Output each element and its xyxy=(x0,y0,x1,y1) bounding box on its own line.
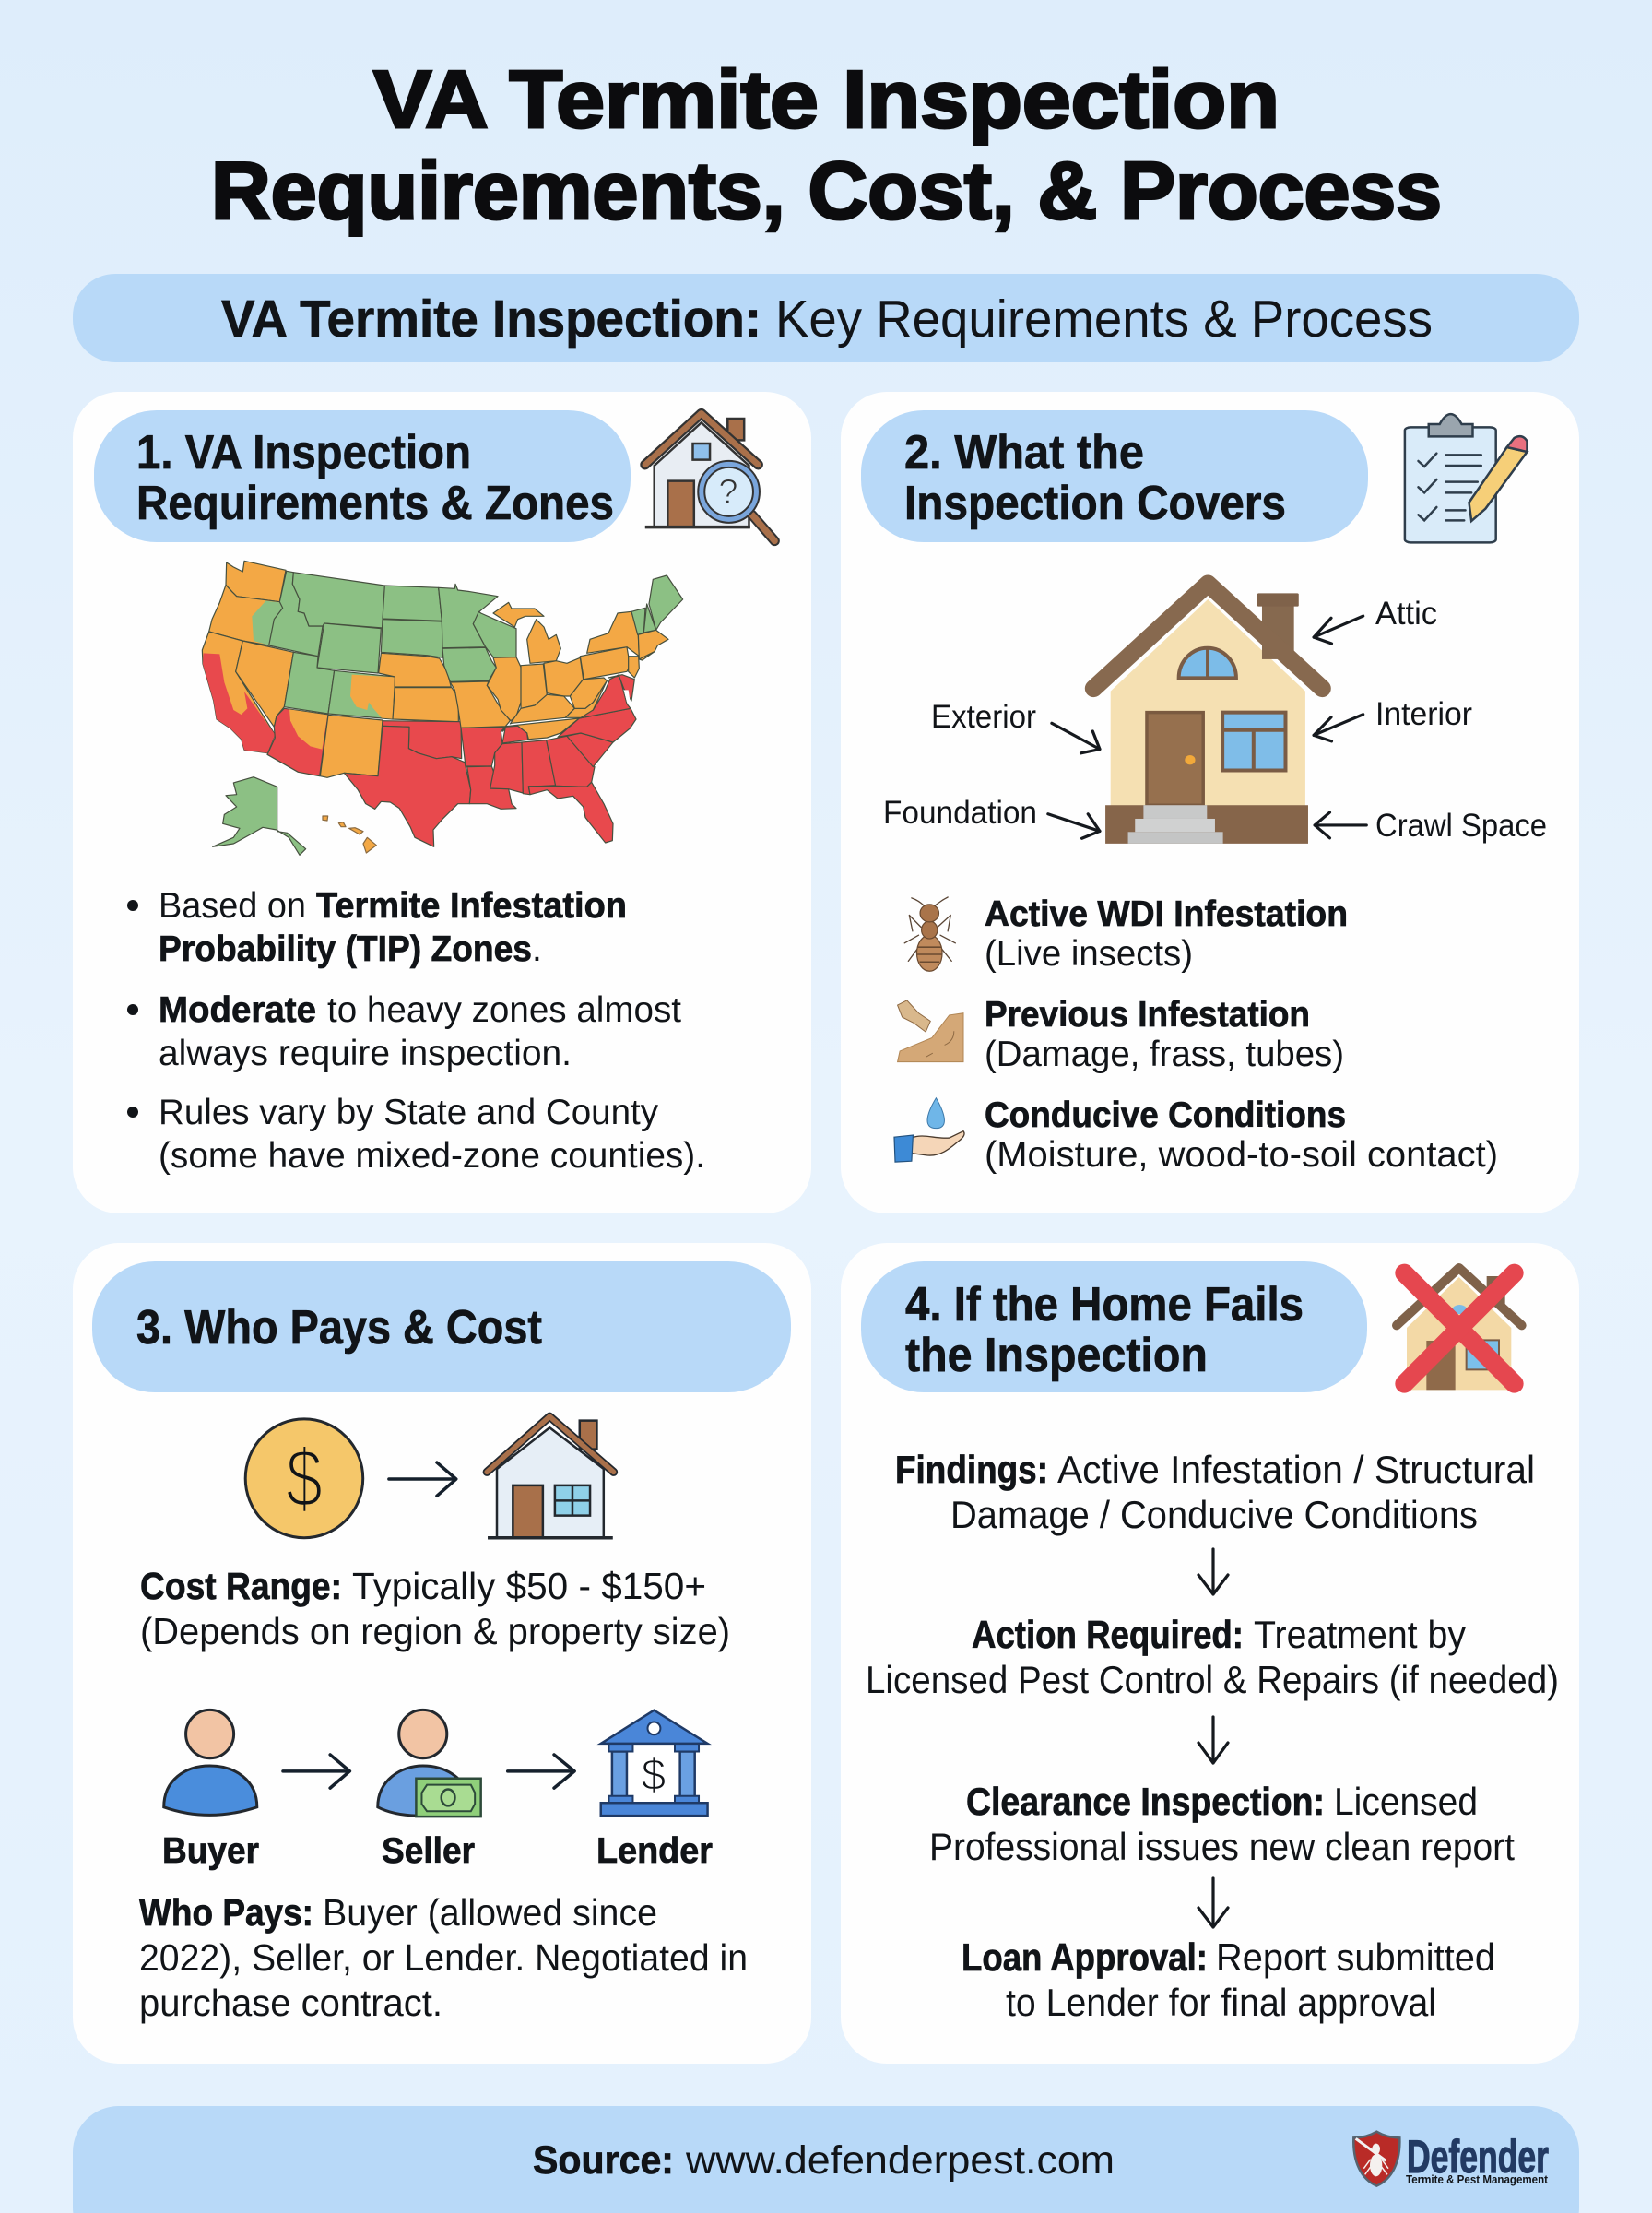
flow step: findings: Active Infestation / Structural xyxy=(1057,1448,1535,1491)
text: who pays: 2022), Seller, or Lender. Negotiated in xyxy=(139,1936,748,1979)
subtitle banner: VA Termite Inspection: xyxy=(221,290,761,349)
bullet list: TIP zones: Based on xyxy=(159,886,306,926)
logo: Defender: Defender xyxy=(1407,2131,1549,2183)
bullet list: TIP zones: . xyxy=(532,929,542,969)
text: who pays: purchase contract. xyxy=(139,1982,442,2024)
bullet list: TIP zones: Moderate xyxy=(159,990,316,1030)
diagram: house with inspection areas xyxy=(883,584,1547,844)
heading pill 3: 3. Who Pays & Cost xyxy=(136,1301,542,1355)
flow step: clearance inspection: Professional issues new clean report xyxy=(929,1825,1515,1868)
icons: buyer, seller, lender flow: Seller xyxy=(382,1831,475,1871)
heading pill 4: the Inspection xyxy=(905,1329,1208,1382)
flow step: loan approval xyxy=(962,1935,1495,2024)
logo: Defender: Termite & Pest Management xyxy=(1406,2172,1549,2186)
eastern states xyxy=(439,575,683,843)
text: cost range: (Depends on region & property size) xyxy=(140,1610,730,1652)
flow step: findings: Damage / Conducive Conditions xyxy=(950,1493,1478,1536)
western states xyxy=(202,561,471,855)
diagram: house with inspection areas: Attic xyxy=(1375,596,1437,632)
icon: crossed-out house xyxy=(1397,1268,1522,1390)
list: what inspector looks for: (Damage, frass, tubes) xyxy=(985,1035,1344,1074)
source line: Source: xyxy=(533,2138,674,2183)
icon: house with magnifier xyxy=(645,413,774,541)
list: what inspector looks for: Conducive Conditions xyxy=(985,1095,1346,1135)
icons: buyer, seller, lender flow: $ xyxy=(642,1751,666,1800)
arrows pointing to house xyxy=(1048,616,1366,838)
text: who pays: Who Pays: xyxy=(139,1891,313,1934)
list: what inspector looks for xyxy=(985,894,1498,1175)
text: who pays xyxy=(139,1891,748,2024)
arrow down xyxy=(1198,1878,1228,1927)
text: cost range: Typically $50 - $150+ xyxy=(352,1565,706,1607)
bullet list: TIP zones: to heavy zones almost xyxy=(327,990,681,1030)
subtitle banner: Key Requirements & Process xyxy=(775,290,1433,349)
flow step: clearance inspection xyxy=(929,1780,1515,1868)
icon: termite xyxy=(904,897,955,971)
icon: dollar coin to house xyxy=(245,1416,614,1538)
icon: house with magnifier: ? xyxy=(718,473,738,512)
subtitle banner xyxy=(73,274,1579,362)
arrow down xyxy=(1198,1549,1228,1594)
list: what inspector looks for: (Live insects) xyxy=(985,934,1193,974)
list: what inspector looks for: Previous Infestation xyxy=(985,995,1310,1035)
icons: buyer, seller, lender flow: Lender xyxy=(596,1831,713,1871)
heading pill 1: Requirements & Zones xyxy=(136,477,614,530)
heading pill 2: Inspection Covers xyxy=(904,477,1286,530)
icons: buyer, seller, lender flow: Buyer xyxy=(162,1831,259,1871)
diagram: house with inspection areas: Crawl Space xyxy=(1375,808,1547,844)
icon: dollar coin to house: $ xyxy=(286,1433,323,1525)
list: what inspector looks for: (Moisture, wood-to-soil contact) xyxy=(985,1135,1498,1175)
flow step: action required: Action Required: xyxy=(972,1613,1244,1656)
heading pill 4: 4. If the Home Fails xyxy=(905,1278,1304,1331)
flow step: loan approval: to Lender for final approval xyxy=(1006,1981,1436,2024)
heading pill 1: 1. VA Inspection xyxy=(136,426,471,479)
diagram: house with inspection areas: Interior xyxy=(1375,696,1472,732)
title: Requirements, Cost, & Process xyxy=(211,145,1442,236)
panel: 2. what the inspection covers xyxy=(841,392,1579,1213)
house illustration xyxy=(1048,584,1366,844)
diagram: house with inspection areas: Foundation xyxy=(883,795,1037,831)
icon: water drop and hand xyxy=(894,1098,964,1162)
flow step: findings xyxy=(895,1448,1535,1536)
map: US termite infestation probability zones xyxy=(202,561,683,855)
bullet list: TIP zones: always require inspection. xyxy=(159,1034,572,1073)
panel: 1. VA inspection requirements and zones xyxy=(73,392,811,1213)
icon: wood damage xyxy=(898,1000,963,1062)
flow step: loan approval: Loan Approval: xyxy=(962,1935,1208,1979)
logo: Defender xyxy=(1353,2131,1549,2186)
panel: 4. if the home fails the inspection xyxy=(841,1243,1579,2064)
flow step: clearance inspection: Clearance Inspection: xyxy=(966,1780,1325,1823)
title: VA Termite Inspection xyxy=(373,53,1280,145)
flow step: clearance inspection: Licensed xyxy=(1334,1780,1478,1823)
icon: clipboard and pencil xyxy=(1405,414,1527,542)
title xyxy=(211,53,1442,236)
panel: 3. who pays and cost xyxy=(73,1243,811,2064)
flow step: findings: Findings: xyxy=(895,1448,1048,1491)
diagram: house with inspection areas: Exterior xyxy=(931,699,1036,735)
flow step: action required xyxy=(866,1613,1559,1701)
list: what inspector looks for: Active WDI Infestation xyxy=(985,894,1348,934)
heading pill 2 xyxy=(861,410,1368,542)
flow step: action required: Licensed Pest Control & Repairs (if needed) xyxy=(866,1658,1559,1701)
heading pill 3 xyxy=(92,1261,791,1392)
icons: buyer, seller, lender flow xyxy=(162,1710,713,1871)
text: cost range xyxy=(140,1565,730,1652)
bullet list: TIP zones: Termite Infestation xyxy=(316,886,627,926)
heading pill 4 xyxy=(861,1261,1367,1392)
text: who pays: Buyer (allowed since xyxy=(323,1891,657,1934)
source line: www.defenderpest.com xyxy=(685,2138,1115,2183)
flow step: loan approval: Report submitted xyxy=(1216,1935,1495,1979)
heading pill 1 xyxy=(94,410,631,542)
footer xyxy=(73,2106,1579,2213)
heading pill 2: 2. What the xyxy=(904,426,1144,479)
bullet list: TIP zones xyxy=(127,886,705,1176)
arrow down xyxy=(1198,1717,1228,1763)
text: cost range: Cost Range: xyxy=(140,1565,342,1607)
bullet list: TIP zones: Rules vary by State and County xyxy=(159,1093,658,1132)
flow step: action required: Treatment by xyxy=(1254,1613,1466,1656)
bullet list: TIP zones: Probability (TIP) Zones xyxy=(159,929,532,969)
bullet list: TIP zones: (some have mixed-zone counties). xyxy=(159,1136,705,1176)
